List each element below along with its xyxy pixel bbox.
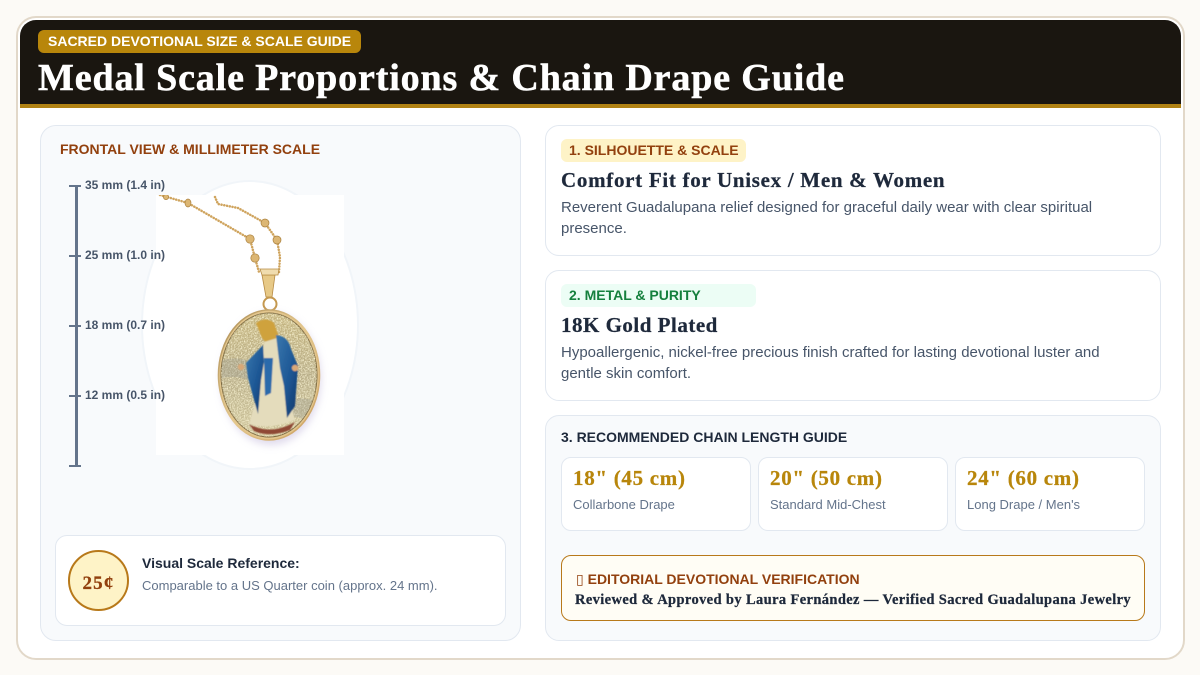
chain option 18 inch [561, 457, 751, 531]
drape 20 inch: Standard Mid-Chest [770, 497, 886, 512]
text: gold plated: Hypoallergenic, nickel-free precious finish crafted for lasting devotional luster and gentle skin comfort. [561, 344, 1100, 382]
medal illustration [158, 195, 324, 448]
coin icon [68, 550, 129, 611]
ruler tick 18 mm [69, 325, 81, 327]
roses at the base [249, 422, 295, 434]
ruler label 25 mm: 25 mm (1.0 in) [85, 248, 165, 262]
text: comfort fit: Reverent Guadalupana relief designed for graceful daily wear with clear spiritual presence. [561, 199, 1092, 237]
chain [160, 195, 280, 272]
ruler axis [75, 185, 78, 466]
coin icon: 25¢ [82, 573, 115, 594]
drape 18 inch: Collarbone Drape [573, 497, 675, 512]
chain option 20 inch [758, 457, 948, 531]
drape 24 inch: Long Drape / Men's [967, 497, 1080, 512]
heading: gold plated: 18K Gold Plated [561, 313, 718, 337]
header badge: SACRED DEVOTIONAL SIZE & SCALE GUIDE [48, 33, 351, 49]
hands [238, 364, 244, 370]
ruler label 12 mm: 12 mm (0.5 in) [85, 388, 165, 402]
coin reference card [55, 535, 506, 626]
blue mantle left [246, 345, 264, 414]
header badge [38, 30, 361, 53]
blue mantle right [276, 335, 298, 418]
length 18 inch: 18" (45 cm) [573, 466, 686, 490]
medal shadow [221, 313, 321, 445]
hair [256, 320, 279, 345]
heading: chain length guide: 3. RECOMMENDED CHAIN LENGTH GUIDE [561, 429, 847, 445]
panel heading: frontal view: FRONTAL VIEW & MILLIMETER SCALE [60, 141, 320, 157]
coin reference title: Visual Scale Reference: [142, 555, 300, 571]
coin reference text: Comparable to a US Quarter coin (approx. 24 mm). [142, 578, 438, 593]
chain beads [163, 194, 281, 262]
sash [264, 358, 273, 396]
panel: frontal view and scale [40, 125, 521, 641]
panel: chain length guide [545, 415, 1161, 641]
badge: silhouette and scale: 1. SILHOUETTE & SCALE [569, 142, 739, 158]
face texture [220, 312, 320, 438]
panel: metal and purity [545, 270, 1161, 401]
medal image backdrop [156, 195, 344, 455]
bail [262, 275, 275, 297]
verification text: Reviewed & Approved by Laura Fernández — Verified Sacred Guadalupana Jewelry [575, 592, 1131, 608]
badge: metal and purity: 2. METAL & PURITY [569, 287, 701, 303]
ruler label 18 mm: 18 mm (0.7 in) [85, 318, 165, 332]
editorial verification callout [561, 555, 1145, 621]
badge: metal and purity [561, 284, 756, 307]
panel: silhouette and scale [545, 125, 1161, 256]
header banner [20, 20, 1181, 108]
length 20 inch: 20" (50 cm) [770, 466, 883, 490]
medal rim [218, 310, 320, 440]
ruler tick 12 mm [69, 395, 81, 397]
ruler tick 25 mm [69, 255, 81, 257]
heading: comfort fit: Comfort Fit for Unisex / Men & Women [561, 168, 945, 192]
ruler tick base [69, 465, 81, 467]
medal face [221, 313, 317, 437]
ruler tick 35 mm [69, 185, 81, 187]
main title: Medal Scale Proportions & Chain Drape Guide [38, 57, 845, 99]
medal backdrop [141, 180, 359, 470]
badge: silhouette and scale [561, 139, 746, 162]
white robe [249, 338, 295, 426]
ruler label 35 mm: 35 mm (1.4 in) [85, 178, 165, 192]
verification title: ▯ EDITORIAL DEVOTIONAL VERIFICATION [576, 571, 860, 588]
chain option 24 inch [955, 457, 1145, 531]
length 24 inch: 24" (60 cm) [967, 466, 1080, 490]
